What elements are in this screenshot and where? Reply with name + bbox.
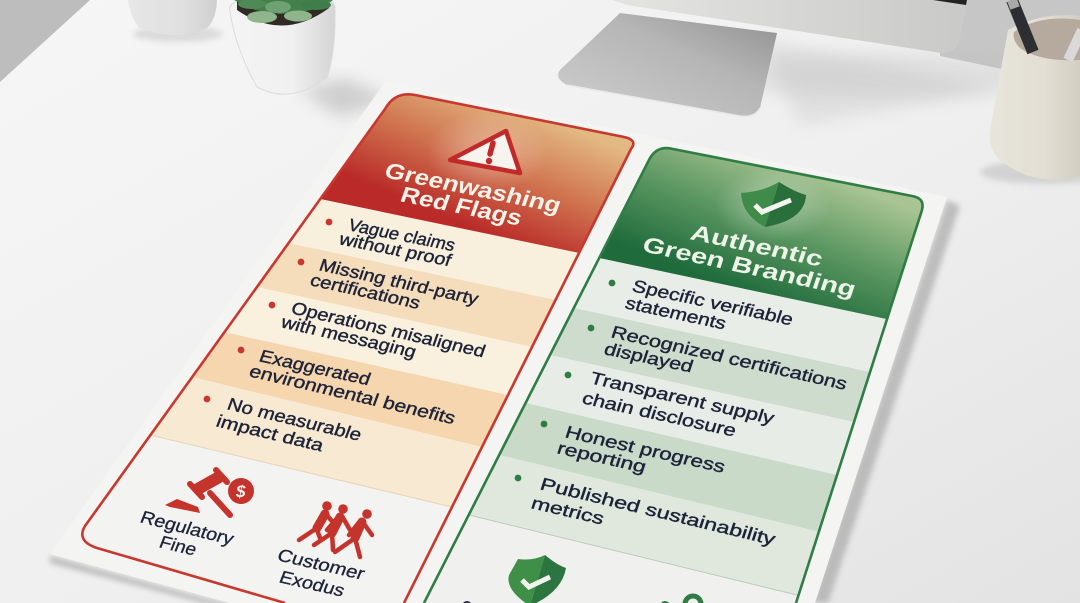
red flag list bands	[150, 199, 579, 507]
icon: gavel and fine coin	[165, 470, 254, 515]
red panel title: Red Flags	[397, 183, 526, 231]
red flag item 5: impact data	[214, 411, 327, 455]
panel: authentic green branding	[424, 148, 923, 603]
green item 5	[515, 474, 778, 549]
green panel title: Green Branding	[639, 233, 859, 302]
red flag item 4: environmental benefits	[247, 361, 458, 428]
green panel header background	[599, 148, 923, 319]
label: regulatory fine: Regulatory	[138, 507, 238, 549]
label: customer exodus: Exodus	[277, 567, 348, 600]
green item 4: reporting	[555, 438, 649, 476]
red flag item 5: No measurable	[225, 394, 364, 445]
green panel title: Authentic	[687, 221, 826, 272]
icon: bottom certification shield	[508, 555, 566, 603]
label: regulatory fine: Fine	[157, 532, 200, 559]
icon: bottom footer tips cropped at edge	[462, 596, 701, 603]
red flag item 1	[326, 215, 458, 270]
green item 2: displayed	[602, 339, 696, 376]
green panel border	[424, 148, 923, 603]
green item 2	[588, 322, 850, 394]
red panel header background	[320, 94, 633, 253]
icon: gavel and fine coin: $	[235, 482, 246, 501]
red flag item 4	[238, 346, 458, 428]
green item 3: Transparent supply	[588, 368, 777, 428]
green item 2: Recognized certifications	[609, 322, 850, 394]
green list bands	[469, 258, 886, 595]
icon: customers walking away	[299, 501, 372, 557]
back cup, partly cropped	[128, 0, 223, 42]
green item 3: chain disclosure	[580, 388, 739, 440]
red flag item 1: Vague claims	[346, 215, 458, 255]
red flag item 3: Operations misaligned	[289, 298, 488, 361]
green item 3	[565, 368, 777, 440]
red flag item 4: Exaggerated	[257, 346, 373, 389]
paper shadow	[50, 200, 960, 603]
pen cup with pens	[980, 0, 1080, 184]
red flag item 5	[204, 394, 364, 455]
label: customer exodus	[275, 545, 368, 600]
monitor stand and screen	[558, 0, 1000, 125]
red flag item 2: Missing third-party	[317, 255, 481, 308]
icon: warning triangle	[426, 112, 550, 192]
red flag item 3: with messaging	[278, 312, 419, 361]
green item 5: metrics	[529, 493, 607, 528]
poster sheet	[50, 82, 947, 603]
label: customer exodus: Customer	[275, 545, 368, 583]
green item 4	[541, 421, 728, 476]
green item 5: Published sustainability	[538, 474, 778, 549]
plant pot with succulent	[230, 0, 392, 117]
red panel border	[82, 94, 633, 603]
red panel title: Greenwashing	[381, 159, 565, 218]
panel: greenwashing red flags	[82, 94, 633, 603]
green item 1: statements	[623, 293, 729, 333]
red flag item 2: certifications	[308, 270, 423, 313]
green item 1: Specific verifiable	[630, 276, 796, 329]
red flag item 1: without proof	[336, 229, 455, 270]
green item 1	[609, 276, 796, 333]
green item 4: Honest progress	[563, 422, 728, 476]
icon: green shield with check	[715, 167, 831, 243]
